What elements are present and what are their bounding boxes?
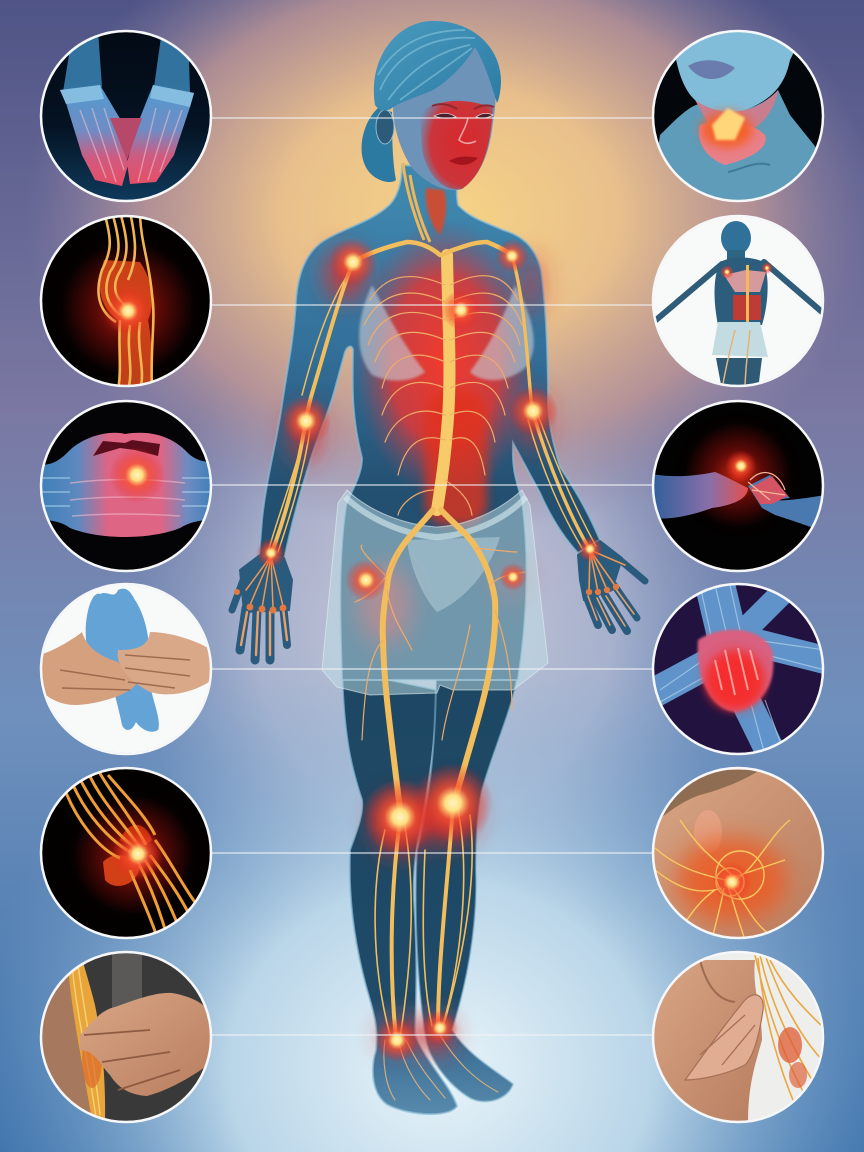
translucent skirt [322, 490, 548, 695]
panel: left 6 hand holding nerve arm [40, 952, 212, 1124]
neck nerves [403, 163, 446, 242]
translucent chest [359, 285, 534, 381]
hair [374, 21, 501, 111]
nerve network [268, 242, 596, 1100]
right hand [578, 541, 645, 631]
inflamed glow points [256, 238, 603, 1062]
panel: left 5 elbow nerves [40, 768, 212, 940]
panel: left 4 white hands with fur [40, 583, 212, 755]
facial features [432, 104, 494, 165]
left leg [342, 670, 457, 1114]
human figure [232, 21, 645, 1114]
panel: right 3 hand glow [652, 400, 826, 572]
torso and arms [259, 165, 600, 680]
ear [376, 110, 394, 144]
panel: right 4 joint bundles [650, 583, 825, 755]
panel: left 2 knee nerves [40, 212, 212, 390]
red chest and abdomen glow [353, 220, 537, 500]
panel: right 1 throat [650, 30, 824, 205]
shoulder and arm redness [290, 249, 546, 1053]
panel: right 5 ear nerves [652, 768, 826, 945]
panel: right 2 small figure [652, 215, 824, 390]
panel: left 3 wrist band [40, 400, 212, 572]
face [393, 40, 496, 190]
left hand [232, 555, 292, 660]
panel: right 6 hand with nerve [652, 952, 826, 1124]
right leg [416, 670, 518, 1102]
connector lines [210, 118, 654, 1035]
ponytail [362, 108, 396, 182]
panel: left 1 wrists and hands [40, 30, 212, 202]
